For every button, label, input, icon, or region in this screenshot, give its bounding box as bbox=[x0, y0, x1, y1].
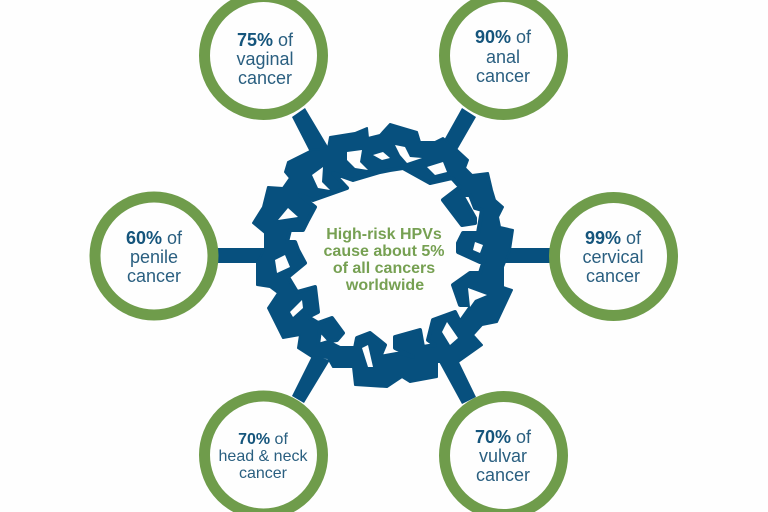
circle: head and neck cancer: 70% of bbox=[238, 431, 288, 448]
center text: worldwide bbox=[345, 277, 424, 294]
circle: vulvar cancer: cancer bbox=[476, 465, 530, 485]
circle: vulvar cancer: vulvar bbox=[479, 446, 527, 466]
circle: anal cancer bbox=[444, 0, 562, 114]
circle: vulvar cancer: 70% of bbox=[475, 427, 532, 447]
circle: penile cancer bbox=[95, 197, 213, 315]
virus ring bbox=[253, 124, 513, 387]
circle: head and neck cancer: cancer bbox=[239, 465, 288, 482]
circle: cervical cancer: cancer bbox=[586, 266, 640, 286]
circle: vulvar cancer bbox=[444, 396, 562, 512]
ring holes bbox=[275, 145, 487, 367]
circle: cervical cancer: cervical bbox=[582, 247, 644, 267]
center text: cause about 5% bbox=[324, 243, 444, 260]
circle: anal cancer: 90% of bbox=[475, 27, 532, 47]
circle: vaginal cancer bbox=[204, 0, 322, 114]
circle: penile cancer: penile bbox=[130, 247, 178, 267]
circle: cervical cancer: 99% of bbox=[585, 228, 642, 248]
circle: vaginal cancer: cancer bbox=[238, 68, 292, 88]
circle: anal cancer: cancer bbox=[476, 66, 530, 86]
center text: High-risk HPVs bbox=[326, 226, 442, 243]
circle: penile cancer: 60% of bbox=[126, 228, 183, 248]
circle: anal cancer: anal bbox=[486, 47, 520, 67]
circle: vaginal cancer: vaginal bbox=[236, 49, 294, 69]
center text bbox=[324, 226, 444, 294]
circle: head and neck cancer: head & neck bbox=[219, 448, 308, 465]
connector spokes bbox=[215, 108, 553, 404]
circle: head and neck cancer bbox=[204, 396, 322, 512]
circle: vaginal cancer: 75% of bbox=[237, 30, 294, 50]
center text: of all cancers bbox=[333, 260, 435, 277]
circle: cervical cancer bbox=[554, 198, 672, 316]
circle: penile cancer: cancer bbox=[127, 266, 181, 286]
